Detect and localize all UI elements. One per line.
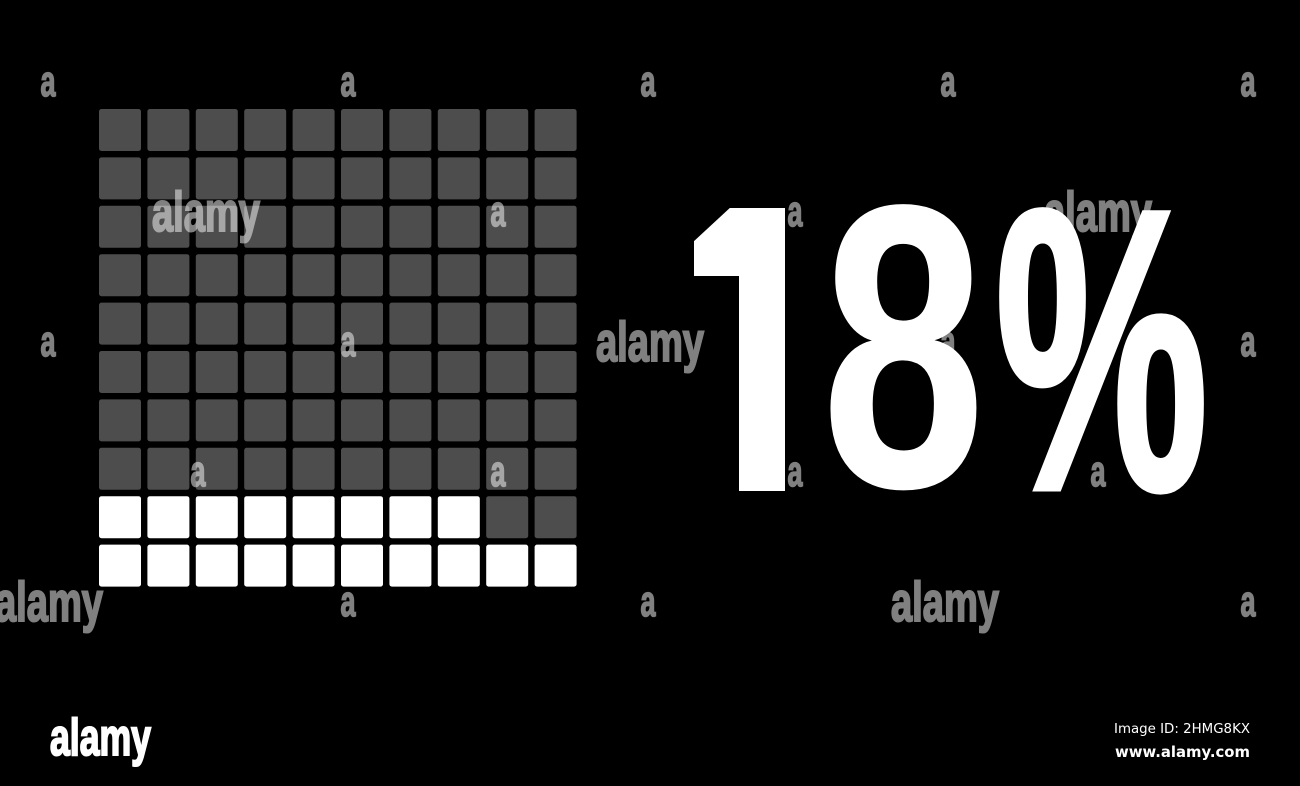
watermark pattern: a (340, 317, 356, 366)
watermark pattern: a (40, 317, 56, 366)
watermark pattern: a (1090, 447, 1106, 496)
website url: www.alamy.com (1115, 743, 1250, 761)
watermark pattern: alamy (1044, 180, 1152, 243)
watermark pattern: a (640, 577, 656, 626)
watermark pattern: a (1240, 57, 1256, 106)
watermark pattern: alamy (152, 180, 260, 243)
watermark pattern: a (1240, 317, 1256, 366)
watermark pattern: a (190, 447, 206, 496)
watermark pattern (0, 57, 1256, 633)
unfilled grey squares (82) (99, 109, 577, 538)
big percentage value (694, 204, 1204, 495)
watermark pattern: alamy (596, 310, 704, 373)
watermark pattern: a (340, 577, 356, 626)
watermark pattern: alamy (891, 570, 999, 633)
waffle chart: 18 of 100 squares filled (99, 109, 577, 587)
watermark pattern: a (788, 187, 803, 236)
watermark pattern: a (940, 57, 956, 106)
watermark pattern: a (788, 447, 803, 496)
watermark pattern: a (340, 57, 356, 106)
watermark pattern: a (1240, 577, 1256, 626)
digit 1: 1 (679, 120, 839, 578)
watermark pattern: a (40, 57, 56, 106)
watermark pattern: a (490, 447, 506, 496)
watermark pattern: a (490, 187, 506, 236)
logo: alamy: alamy (50, 709, 151, 767)
watermark pattern: a (640, 57, 656, 106)
percent sign: % (995, 126, 1208, 573)
digit 8: 8 (822, 122, 985, 572)
image id: Image ID: 2HMG8KX (1114, 722, 1250, 737)
filled white squares (18) (99, 496, 577, 587)
watermark pattern: a (940, 317, 956, 366)
